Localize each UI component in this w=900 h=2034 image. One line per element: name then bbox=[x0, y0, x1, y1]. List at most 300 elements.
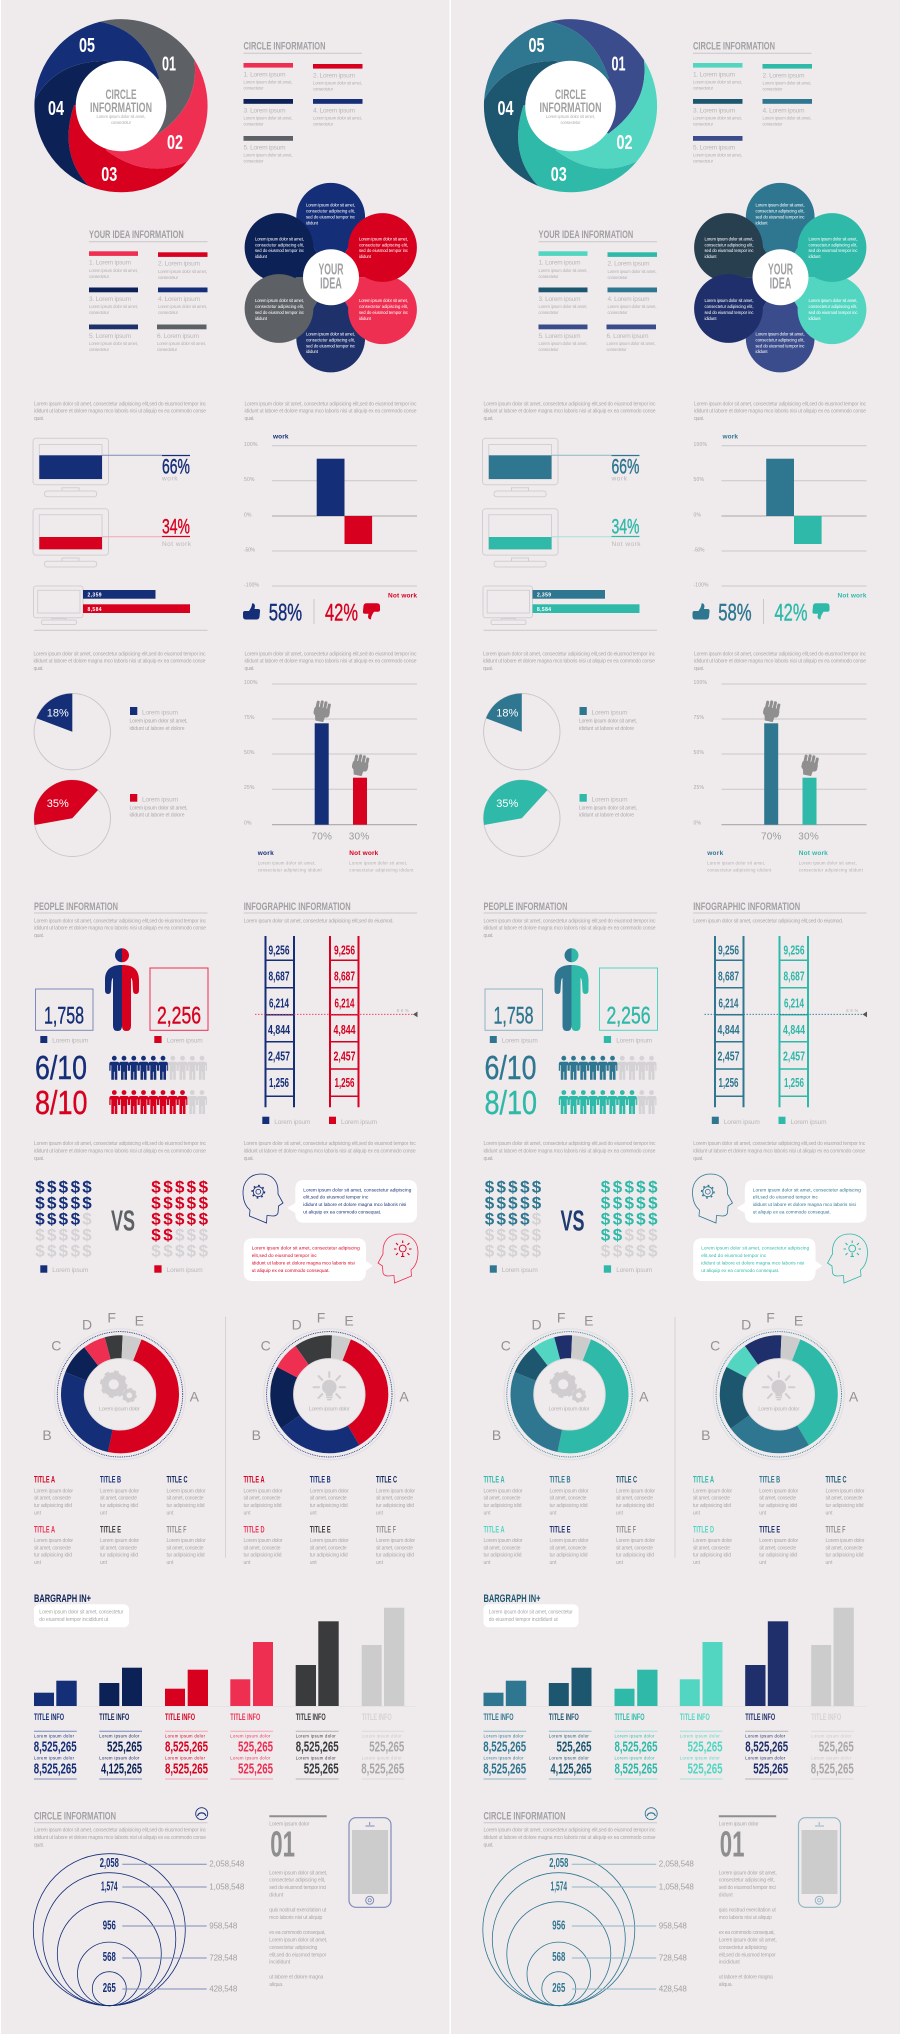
stat column: charcoal bbox=[296, 1712, 339, 1779]
pie chart: 18% bbox=[34, 694, 187, 770]
stat box: 1,758: Lorem ipsum bbox=[502, 1037, 538, 1044]
bar chart: raised fists 70% and 30%: 50% bbox=[244, 750, 255, 756]
text column: 01: didunt bbox=[719, 1893, 733, 1899]
ladder chart: 9,256 bbox=[718, 942, 739, 957]
title grid: first donut: TITLE A bbox=[34, 1524, 55, 1535]
monitor with two bars bbox=[483, 586, 640, 624]
ladder chart: Lorem ipsum bbox=[341, 1119, 377, 1126]
text column: 01: elit,sed do eiusmod tempor bbox=[269, 1952, 327, 1958]
nested circles chart: 956 bbox=[552, 1918, 565, 1932]
pictogram: dollars right: $ bbox=[636, 1226, 646, 1245]
stat column: green: 8,525,265 bbox=[614, 1739, 658, 1755]
flower diagram: your idea: consectetur adipiscing elit, bbox=[756, 338, 804, 342]
ladder chart: 2,457 bbox=[783, 1048, 805, 1063]
legend: circle information items: Lorem ipsum dolor sit amet, bbox=[762, 80, 812, 86]
statistic: thumbs 58% and 42% bbox=[243, 592, 417, 627]
title grid: first donut: unt bbox=[34, 1511, 42, 1517]
stat column: red: 8,525,265 bbox=[165, 1739, 208, 1755]
statistic: thumbs 58% and 42%: Not work bbox=[838, 592, 867, 599]
stat box: 1,758 bbox=[485, 989, 542, 1044]
stat column: teal blue: 8,525,265 bbox=[483, 1739, 526, 1755]
heading: bargraph: Lorem ipsum dolor sit amet, consectetur bbox=[39, 1610, 124, 1616]
stat box: 2,256 bbox=[150, 968, 208, 1044]
title grid: first donut: tur adipisicing idid bbox=[34, 1503, 72, 1509]
title grid: first donut: tur adipisicing idid bbox=[484, 1503, 522, 1509]
title grid: first donut: sit amet, consecte bbox=[550, 1545, 587, 1551]
pictogram: dollars right: $ bbox=[601, 1210, 611, 1229]
stat column: mint bbox=[680, 1712, 722, 1779]
title grid: first donut: unt bbox=[166, 1511, 174, 1517]
ladder chart: 8,687 bbox=[784, 969, 804, 984]
title grid: second donut: tur adipisicing idid bbox=[693, 1553, 731, 1559]
legend: your idea items: consectetur bbox=[538, 310, 559, 315]
legend: your idea items: Lorem ipsum dolor sit amet, bbox=[89, 268, 138, 273]
pie chart: 18%: Lorem ipsum bbox=[592, 710, 628, 717]
swirl circle chart: 02 bbox=[616, 132, 632, 154]
pictogram: dollars right: $ bbox=[151, 1194, 161, 1213]
bar chart: raised fists 70% and 30%: 50% bbox=[694, 750, 705, 756]
text block: dollars intro bbox=[484, 1141, 656, 1162]
title grid: first donut: TITLE F bbox=[616, 1524, 636, 1535]
pictogram: dollars left: $ bbox=[82, 1242, 92, 1261]
monitor gauge: 66% work: work bbox=[610, 476, 628, 482]
text block: heads intro: quat. bbox=[693, 1156, 703, 1162]
heading: infographic information bbox=[693, 901, 866, 924]
heading: infographic information: Lorem ipsum dolor sit amet, consectetur adipisicing elit,sed do eiusmod. bbox=[244, 918, 394, 924]
text block: pies intro: ididunt ut labore et dolore magna mco laboris nisi ut aliquip ex ea commodo conse bbox=[34, 659, 206, 665]
text column: 01: ut labore et dolore magna bbox=[719, 1975, 773, 1981]
bar chart: work vs not work: 100% bbox=[244, 442, 258, 448]
pictogram: dollars left: $ bbox=[35, 1194, 45, 1213]
callout: blue speech bubble: ididunt ut labore et dolore magna mco laboris nisi bbox=[753, 1202, 856, 1207]
people row: 6/10 bbox=[484, 1049, 656, 1086]
legend: your idea items: Lorem ipsum dolor sit amet, bbox=[158, 304, 207, 309]
pictogram: dollars left: $ bbox=[496, 1194, 506, 1213]
statistic: thumbs 58% and 42%: 58% bbox=[269, 600, 302, 627]
text column: 01: elit,sed do eiusmod tempor bbox=[719, 1952, 776, 1958]
legend: your idea items: Lorem ipsum dolor sit amet, bbox=[89, 341, 138, 346]
stat box: 2,256: Lorem ipsum bbox=[616, 1037, 652, 1044]
flower diagram: your idea: sed do eiusmod tempor inc bbox=[704, 310, 754, 315]
pictogram: dollars right: $ bbox=[648, 1210, 658, 1229]
donut chart: gears: B bbox=[42, 1427, 52, 1443]
stat column: dark teal: Lorem ipsum dolor bbox=[549, 1733, 589, 1738]
stat box: 2,256: Lorem ipsum bbox=[167, 1037, 203, 1044]
heading: circle information lower: quat. bbox=[484, 1843, 494, 1849]
title grid: second donut: Lorem ipsum dolor bbox=[759, 1538, 799, 1544]
pictogram: dollars right: $ bbox=[151, 1242, 161, 1261]
pictogram: dollars left: $ bbox=[71, 1210, 81, 1229]
swirl circle chart: 01 bbox=[162, 53, 176, 75]
ladder chart: Lorem ipsum bbox=[790, 1119, 826, 1126]
text column: 01: didunt bbox=[269, 1893, 284, 1899]
statistic: thumbs 58% and 42%: Not work bbox=[388, 592, 417, 599]
title grid: first donut: tur adipisicing idid bbox=[34, 1553, 72, 1559]
title grid: second donut: tur adipisicing idid bbox=[310, 1503, 348, 1509]
title grid: first donut: unt bbox=[484, 1560, 491, 1566]
legend: circle information items: Lorem ipsum dolor sit amet, bbox=[313, 116, 362, 121]
legend: your idea items: Lorem ipsum dolor sit amet, bbox=[89, 304, 138, 309]
title grid: second donut: sit amet, consecte bbox=[244, 1545, 281, 1551]
title grid: first donut: sit amet, consecte bbox=[166, 1545, 204, 1551]
text column: 01: incididunt bbox=[719, 1960, 740, 1966]
nested circles chart: 728,548 bbox=[209, 1953, 238, 1962]
swirl circle chart: 05 bbox=[528, 35, 544, 57]
bar chart: raised fists 70% and 30%: 100% bbox=[244, 680, 258, 686]
title grid: first donut: Lorem ipsum dolor bbox=[34, 1538, 73, 1544]
pictogram: dollars left: $ bbox=[532, 1194, 542, 1213]
stat column: mint: Lorem ipsum dolor bbox=[680, 1756, 720, 1761]
heading: circle information lower: CIRCLE INFORMATION bbox=[34, 1810, 116, 1822]
stat column: charcoal: TITLE INFO bbox=[296, 1712, 326, 1723]
legend: your idea items: 1. Lorem ipsum bbox=[538, 260, 580, 267]
title grid: second donut: Lorem ipsum dolor bbox=[826, 1488, 865, 1494]
nested circles chart: 728,548 bbox=[659, 1953, 687, 1962]
donut chart: light bulb: F bbox=[766, 1309, 775, 1325]
bar chart: raised fists 70% and 30%: 70% bbox=[761, 832, 782, 842]
icon: split person bbox=[105, 948, 139, 1031]
pie chart: 18%: 18% bbox=[496, 708, 519, 720]
pictogram: dollars left: $ bbox=[485, 1226, 495, 1245]
legend: circle information items: consectetur bbox=[693, 86, 714, 90]
stat column: light grey: 8,525,265 bbox=[361, 1761, 404, 1777]
title grid: first donut: tur adipisicing idid bbox=[100, 1553, 138, 1559]
flower diagram: your idea: Lorem ipsum dolor sit amet, bbox=[808, 298, 858, 303]
title grid: first donut: TITLE A bbox=[484, 1475, 505, 1486]
stat column: charcoal: 525,265 bbox=[304, 1761, 339, 1777]
bar chart: raised fists 70% and 30%: 30% bbox=[349, 832, 369, 842]
title grid: first donut: Lorem ipsum dolor bbox=[550, 1538, 589, 1544]
ladder chart: 4,844 bbox=[783, 1022, 806, 1037]
icon: split person bbox=[554, 948, 588, 1031]
title grid: second donut: TITLE D bbox=[244, 1524, 265, 1535]
nested circles chart: 428,548 bbox=[659, 1984, 687, 1993]
callout: red speech bubble: ut aliquip ex ea commodo consequat. bbox=[252, 1268, 330, 1273]
flower diagram: your idea: consectetur adipiscing elit, bbox=[359, 304, 408, 309]
title grid: second donut: Lorem ipsum dolor bbox=[244, 1538, 283, 1544]
callout: red speech bubble bbox=[244, 1238, 373, 1281]
pie chart: 35% bbox=[34, 780, 188, 856]
stat column: dark teal: Lorem ipsum dolor bbox=[549, 1756, 589, 1761]
pictogram: dollars right: $ bbox=[163, 1226, 173, 1245]
bar chart: work vs not work: -100% bbox=[244, 582, 260, 588]
pictogram: dollars right bbox=[151, 1178, 209, 1261]
text block: fist chart intro: quat. bbox=[244, 666, 254, 672]
bar chart: raised fists 70% and 30%: Lorem ipsum dolor sit amet, bbox=[799, 860, 857, 865]
text block: bar chart intro: Lorem ipsum dolor sit amet, consectetur adipisicing elit,sed do eiusmod tempor inc bbox=[694, 401, 866, 407]
pictogram: dollars left: $ bbox=[532, 1242, 542, 1261]
donut chart: gears: F bbox=[557, 1309, 565, 1325]
pie chart: 35% bbox=[483, 780, 637, 856]
pictogram: dollars left: $ bbox=[485, 1242, 495, 1261]
donut chart: gears: E bbox=[135, 1313, 144, 1329]
heading: infographic information: INFOGRAPHIC INFORMATION bbox=[693, 901, 800, 913]
monitor gauge: 66% work: 66% bbox=[162, 455, 190, 478]
stat column: dark teal: 4,125,265 bbox=[550, 1761, 592, 1777]
legend: dollars: Lorem ipsum bbox=[616, 1267, 652, 1274]
pictogram: dollars left: $ bbox=[508, 1242, 518, 1261]
bar chart: raised fists 70% and 30%: 70% bbox=[311, 832, 332, 842]
pictogram: dollars right: $ bbox=[624, 1178, 634, 1197]
heading: circle information lower: CIRCLE INFORMATION bbox=[484, 1810, 566, 1822]
legend: dollars: Lorem ipsum bbox=[502, 1267, 538, 1274]
donut chart: light bulb: A bbox=[399, 1389, 409, 1405]
donut chart: gears: Lorem ipsum dolor bbox=[548, 1407, 590, 1413]
title grid: first donut: tur adipisicing idid bbox=[616, 1503, 654, 1509]
callout: blue speech bubble: ididunt ut labore et dolore magna mco laboris nisi bbox=[303, 1202, 406, 1207]
flower diagram: your idea: Lorem ipsum dolor sit amet, bbox=[359, 298, 408, 303]
pictogram: dollars left: $ bbox=[496, 1178, 506, 1197]
title grid: first donut: unt bbox=[550, 1560, 557, 1566]
title grid: second donut bbox=[244, 1475, 415, 1566]
pictogram: dollars left: $ bbox=[532, 1178, 542, 1197]
statistic: thumbs 58% and 42%: 42% bbox=[325, 600, 358, 627]
pictogram: dollars left: $ bbox=[71, 1194, 81, 1213]
flower diagram: your idea: consectetur adipiscing elit, bbox=[704, 304, 754, 309]
stat column: light grey: Lorem ipsum dolor bbox=[811, 1733, 852, 1738]
pie chart: 18% bbox=[484, 694, 637, 770]
heading: circle information lower: Lorem ipsum dolor sit amet, consectetur adipisicing elit,sed do eiusmod tempor inc bbox=[34, 1828, 206, 1834]
stat column: blue: 8,525,265 bbox=[34, 1761, 77, 1777]
heading: VS: VS bbox=[111, 1206, 135, 1238]
bar chart: six paired bars bbox=[34, 1608, 417, 1706]
pictogram: dollars right: $ bbox=[624, 1242, 634, 1261]
stat column: pink: 525,265 bbox=[238, 1739, 273, 1755]
statistic: thumbs 58% and 42%: 58% bbox=[718, 600, 752, 627]
text column: 01: quis nostrud exercitation ut bbox=[719, 1908, 776, 1914]
donut chart: gears: D bbox=[531, 1317, 542, 1333]
legend: circle information items bbox=[244, 63, 362, 164]
ladder chart: 8,687 bbox=[718, 969, 739, 984]
bar chart: raised fists 70% and 30%: Lorem ipsum dolor sit amet, bbox=[707, 860, 765, 865]
donut chart: light bulb: B bbox=[252, 1427, 261, 1443]
donut chart: light bulb: D bbox=[741, 1317, 751, 1333]
stat column: light grey: TITLE INFO bbox=[811, 1712, 841, 1723]
title grid: second donut: tur adipisicing idid bbox=[376, 1553, 414, 1559]
pie chart: 35%: Lorem ipsum bbox=[592, 796, 628, 803]
callout: teal speech bubble: ididunt ut labore et dolore magna mco laboris nisi bbox=[701, 1260, 804, 1265]
pictogram: dollars left: $ bbox=[508, 1226, 518, 1245]
heading: infographic information bbox=[244, 901, 417, 924]
title grid: first donut: unt bbox=[100, 1560, 108, 1566]
legend: circle information items: consectetur bbox=[693, 122, 714, 127]
pictogram: dollars right: $ bbox=[163, 1178, 173, 1197]
title grid: first donut: tur adipisicing idid bbox=[166, 1553, 205, 1559]
swirl circle chart: INFORMATION bbox=[540, 99, 602, 115]
text block: monitors intro bbox=[34, 401, 206, 422]
flower diagram: your idea: sed do eiusmod tempor inc bbox=[704, 248, 754, 253]
statistic: thumbs 58% and 42% bbox=[692, 592, 867, 627]
text column: 01: ut labore et dolore magna bbox=[269, 1975, 324, 1981]
flower diagram: your idea: ididunt bbox=[704, 316, 717, 321]
flower diagram: your idea: ididunt bbox=[255, 254, 268, 259]
heading: VS: VS bbox=[560, 1206, 584, 1238]
title grid: second donut: tur adipisicing idid bbox=[310, 1553, 348, 1559]
stat column: red: 8,525,265 bbox=[165, 1761, 208, 1777]
stat box: 1,758: 1,758 bbox=[44, 1002, 84, 1029]
monitor gauge: 34% not work: Not work bbox=[162, 541, 192, 548]
title grid: first donut: TITLE E bbox=[100, 1524, 121, 1535]
flower diagram: your idea: Lorem ipsum dolor sit amet, bbox=[704, 236, 754, 241]
donut chart: light bulb: E bbox=[794, 1313, 803, 1329]
donut chart: gears: D bbox=[82, 1317, 92, 1333]
swirl circle chart: Lorem ipsum dolor sit amet, bbox=[546, 114, 595, 119]
legend: circle information items: Lorem ipsum dolor sit amet, bbox=[244, 80, 292, 84]
title grid: second donut: TITLE E bbox=[310, 1524, 331, 1535]
legend: your idea items: 6. Lorem ipsum bbox=[606, 333, 648, 340]
pictogram: dollars left: $ bbox=[71, 1178, 81, 1197]
bar chart: raised fists 70% and 30% bbox=[694, 680, 866, 873]
legend: your idea items: consectetur bbox=[158, 275, 179, 280]
text block: fist chart intro bbox=[244, 651, 417, 672]
text block: pies intro: quat. bbox=[34, 666, 44, 672]
text block: pies intro: Lorem ipsum dolor sit amet, consectetur adipisicing elit,sed do eiusmod tempor inc bbox=[483, 651, 656, 657]
title grid: first donut: Lorem ipsum dolor bbox=[616, 1488, 655, 1494]
title grid: first donut bbox=[34, 1475, 206, 1566]
bar chart: six paired bars bbox=[484, 1608, 866, 1706]
stat box: 1,758 bbox=[36, 989, 93, 1044]
ladder chart: 8,687 bbox=[268, 969, 290, 984]
stat column: red bbox=[165, 1712, 208, 1779]
text column: 01: consectetur adipiscing elit, bbox=[719, 1878, 775, 1884]
heading: bargraph: Lorem ipsum dolor sit amet, consectetur bbox=[489, 1610, 573, 1616]
monitor with two bars bbox=[34, 586, 190, 624]
title grid: second donut: unt bbox=[310, 1511, 317, 1517]
title grid: second donut: tur adipisicing idid bbox=[826, 1553, 864, 1559]
flower diagram: your idea: ididunt bbox=[306, 220, 319, 226]
monitor with two bars: 8,584 bbox=[88, 607, 102, 613]
ladder chart: 6,214 bbox=[784, 995, 804, 1010]
text block: fist chart intro: ididunt ut labore et dolore magna mco laboris nisi ut aliquip ex ea commodo conse bbox=[694, 659, 866, 665]
stat column: green bbox=[614, 1712, 658, 1779]
text column: 01: consectetur adipisicing bbox=[269, 1945, 318, 1951]
nested circles chart: 2,058 bbox=[549, 1856, 568, 1870]
nested circles chart: 958,548 bbox=[659, 1922, 687, 1930]
text column: 01: mco laboris nisi ut aliquip bbox=[719, 1915, 772, 1921]
monitor gauge: 34% not work bbox=[482, 509, 641, 567]
title grid: second donut: tur adipisicing idid bbox=[759, 1503, 797, 1509]
legend: your idea items: Lorem ipsum dolor sit amet, bbox=[157, 341, 206, 346]
flower diagram: your idea: Lorem ipsum dolor sit amet, bbox=[756, 332, 804, 336]
icon: smartphone bbox=[798, 1818, 840, 1907]
title grid: first donut: sit amet, consecte bbox=[166, 1496, 204, 1502]
legend: circle information items: 5. Lorem ipsum bbox=[693, 144, 735, 151]
text column: 01: incididunt bbox=[269, 1960, 291, 1966]
pictogram: dollars right: $ bbox=[151, 1178, 161, 1197]
donut chart: light bulb: D bbox=[292, 1317, 302, 1333]
stat column: pink: TITLE INFO bbox=[230, 1712, 260, 1723]
bar chart: work vs not work: 100% bbox=[694, 442, 708, 448]
pictogram: dollars left: $ bbox=[485, 1194, 495, 1213]
legend: circle information items: Lorem ipsum dolor sit amet, bbox=[762, 116, 812, 121]
title grid: first donut: Lorem ipsum dolor bbox=[484, 1488, 523, 1494]
heading: people information: PEOPLE INFORMATION bbox=[34, 901, 118, 913]
text block: heads intro: Lorem ipsum dolor sit amet, consectetur adipisicing elit,sed do eiusmod tempor inc bbox=[244, 1141, 416, 1147]
title grid: first donut bbox=[484, 1475, 655, 1566]
flower diagram: your idea: Lorem ipsum dolor sit amet, bbox=[306, 203, 355, 208]
stat column: green: TITLE INFO bbox=[614, 1712, 644, 1723]
title grid: second donut: Lorem ipsum dolor bbox=[310, 1538, 349, 1544]
people row: 8/10 bbox=[35, 1084, 207, 1121]
nested circles chart: 1,058,548 bbox=[659, 1882, 694, 1892]
legend: your idea items: consectetur bbox=[538, 347, 559, 352]
stat column: teal blue: 8,525,265 bbox=[483, 1761, 526, 1777]
bar chart: raised fists 70% and 30%: 75% bbox=[694, 715, 705, 721]
legend: your idea items: consectetur bbox=[89, 347, 110, 352]
heading: circle information lower: ididunt ut labore et dolore magna mco laboris nisi ut aliquip ex ea commodo conse bbox=[34, 1835, 206, 1841]
text block: dollars intro: ididunt ut labore et dolore magna mco laboris nisi ut aliquip ex ea commodo conse bbox=[34, 1149, 206, 1155]
title grid: first donut: unt bbox=[34, 1560, 42, 1566]
legend: your idea items: 2. Lorem ipsum bbox=[158, 261, 200, 268]
pie chart: 18%: Lorem ipsum bbox=[142, 710, 178, 717]
flower diagram: your idea bbox=[245, 183, 417, 372]
text column: 01 bbox=[719, 1816, 777, 1988]
donut chart: light bulb: B bbox=[701, 1427, 710, 1443]
title grid: second donut: tur adipisicing idid bbox=[759, 1553, 797, 1559]
flower diagram: your idea: consectetur adipiscing elit, bbox=[255, 242, 304, 247]
legend: circle information items: 2. Lorem ipsum bbox=[762, 72, 804, 79]
pictogram: dollars left: $ bbox=[35, 1226, 45, 1245]
pictogram: dollars right: $ bbox=[187, 1242, 197, 1261]
legend: your idea items bbox=[89, 251, 208, 352]
title grid: second donut: tur adipisicing idid bbox=[693, 1503, 731, 1509]
swirl circle chart: 03 bbox=[551, 164, 567, 186]
nested circles chart: 1,574 bbox=[551, 1880, 567, 1894]
flower diagram: your idea: Lorem ipsum dolor sit amet, bbox=[359, 236, 408, 241]
text block: fist chart intro: Lorem ipsum dolor sit amet, consectetur adipisicing elit,sed do eiusmod tempor inc bbox=[694, 651, 866, 657]
people row: 6/10: 6/10 bbox=[484, 1049, 536, 1086]
people row: 8/10: 8/10 bbox=[35, 1084, 88, 1121]
title grid: second donut: unt bbox=[759, 1560, 767, 1566]
flower diagram: your idea: Lorem ipsum dolor sit amet, bbox=[306, 332, 355, 336]
text block: monitors intro: quat. bbox=[484, 416, 494, 422]
title grid: first donut: Lorem ipsum dolor bbox=[34, 1488, 73, 1494]
pictogram: dollars right: $ bbox=[163, 1242, 173, 1261]
legend: your idea items: Lorem ipsum dolor sit amet, bbox=[608, 304, 656, 309]
swirl circle chart: 03 bbox=[101, 164, 117, 186]
stat column: dark bbox=[99, 1712, 142, 1779]
flower diagram: your idea: consectetur adipiscing elit, bbox=[306, 209, 355, 214]
legend: your idea items: 2. Lorem ipsum bbox=[608, 261, 650, 268]
pictogram: dollars left: $ bbox=[47, 1242, 57, 1261]
nested circles chart: 265 bbox=[103, 1981, 116, 1995]
monitor with two bars: 2,359 bbox=[537, 592, 551, 598]
stat column: dark teal: 525,265 bbox=[556, 1739, 592, 1755]
stat column: mint: TITLE INFO bbox=[680, 1712, 710, 1723]
pictogram: dollars left: $ bbox=[520, 1226, 530, 1245]
pictogram: dollars left: $ bbox=[485, 1178, 495, 1197]
heading: bargraph: do eiusmod tempor incididunt ut bbox=[39, 1617, 109, 1623]
title grid: second donut: TITLE B bbox=[759, 1475, 780, 1486]
stat column: pink bbox=[230, 1712, 273, 1779]
title grid: second donut: sit amet, consecte bbox=[244, 1496, 281, 1502]
title grid: first donut: sit amet, consecte bbox=[616, 1496, 653, 1502]
bar chart: raised fists 70% and 30%: 25% bbox=[244, 785, 255, 791]
flower diagram: your idea: IDEA bbox=[320, 276, 342, 293]
title grid: second donut: sit amet, consecte bbox=[376, 1496, 413, 1502]
text block: heads intro: Lorem ipsum dolor sit amet, consectetur adipisicing elit,sed do eiusmod tempor inc bbox=[693, 1141, 866, 1147]
pie chart: 18%: Lorem ipsum dolor sit amet, bbox=[130, 719, 188, 725]
donut chart: gears: A bbox=[190, 1389, 200, 1405]
monitor gauge: 66% work: 66% bbox=[612, 455, 640, 478]
heading: bargraph bbox=[484, 1593, 578, 1627]
donut chart: gears: A bbox=[639, 1389, 649, 1405]
flower diagram: your idea: IDEA bbox=[770, 276, 791, 293]
stat column: light grey: 525,265 bbox=[819, 1739, 854, 1755]
ladder chart: 4,844 bbox=[334, 1022, 356, 1037]
pie chart: 35%: ididunt ut labore et dolore bbox=[579, 813, 634, 819]
heading: circle information: CIRCLE INFORMATION bbox=[244, 40, 326, 52]
